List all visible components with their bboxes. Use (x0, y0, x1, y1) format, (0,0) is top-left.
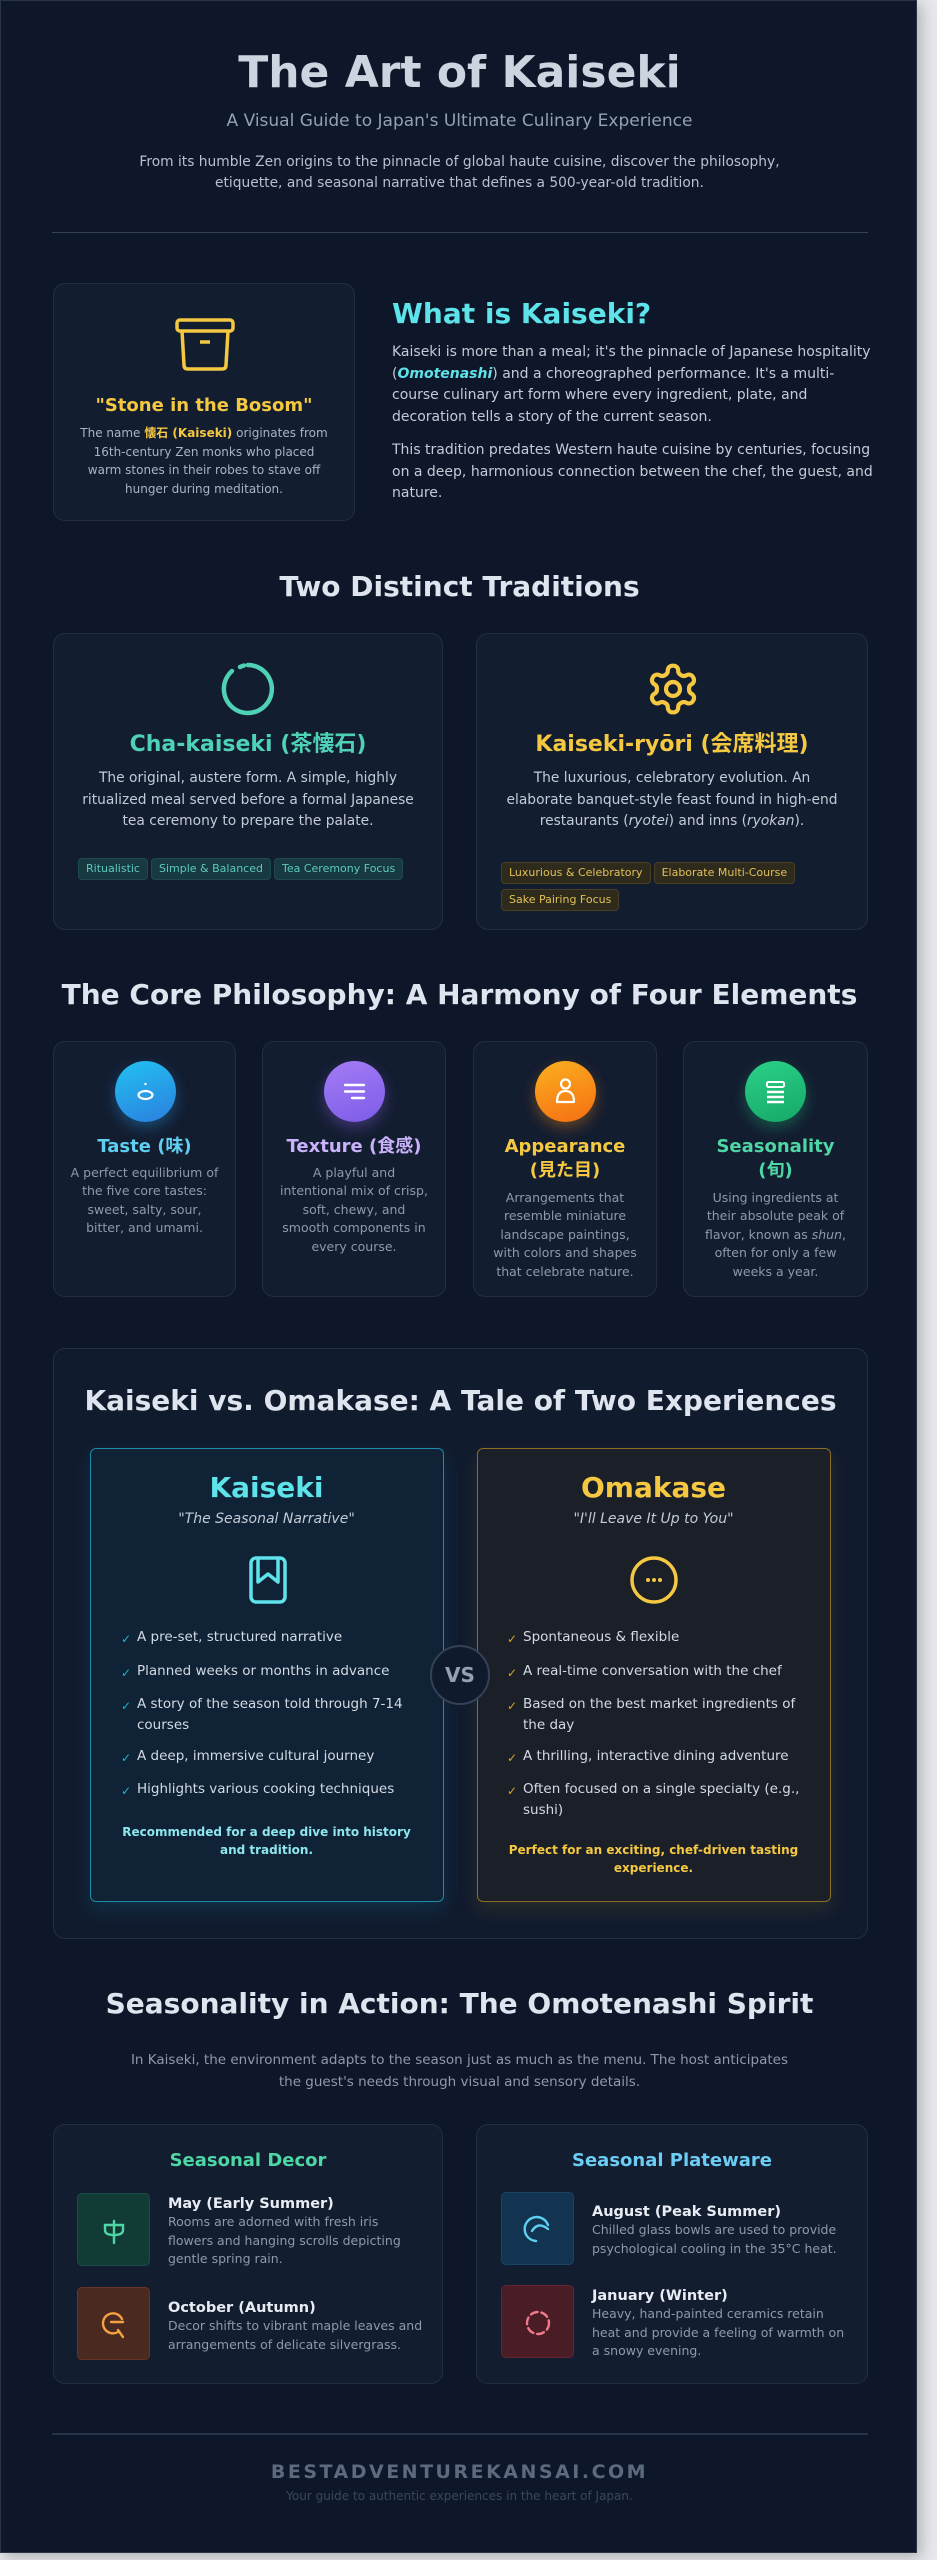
item: january: Heavy, hand-painted ceramics retain heat and provide a feeling of warmth on a snowy evening. (592, 2306, 844, 2358)
icon: gear (650, 664, 696, 714)
tags: cha-kaiseki: Ritualistic (86, 862, 140, 875)
heading: kaiseki-ryori: Kaiseki-ryōri (会席料理) (535, 732, 809, 757)
list: kaiseki: ✓ (121, 1699, 131, 1713)
footer: tagline: Your guide to authentic experiences in the heart of Japan. (286, 2489, 633, 2503)
heading: seasonality: (旬) (758, 1160, 793, 1181)
heading: seasonality in action: Seasonality in Action: The Omotenashi Spirit (106, 1987, 813, 2020)
text: what is kaiseki: Kaiseki is more than a meal; it's the pinnacle of Japanese hospitality (392, 344, 871, 360)
list: kaiseki: ✓ (121, 1666, 131, 1680)
text: cha-kaiseki: The original, austere form. A simple, highly ritualized meal served before a formal Japanese tea ceremony to prepare the palate. (82, 770, 414, 829)
icon: stone box (175, 318, 235, 371)
icon: iris (77, 2193, 150, 2266)
heading: seasonal decor: Seasonal Decor (170, 2150, 326, 2171)
list: omakase: Often focused on a single specialty (e.g., sushi) (523, 1781, 799, 1818)
icon: taste (115, 1061, 176, 1122)
item: january: January (Winter) (592, 2288, 728, 2304)
panel: kaiseki vs omakase (53, 1348, 868, 1939)
panel: seasonal plateware (476, 2124, 868, 2384)
list: kaiseki: ✓ (121, 1632, 131, 1646)
item: january (501, 2285, 844, 2358)
item: october: Decor shifts to vibrant maple leaves and arrangements of delicate silvergrass. (168, 2318, 422, 2352)
icon: vs badge (430, 1645, 490, 1705)
list: omakase: ✓ (507, 1699, 517, 1713)
item: october: October (Autumn) (168, 2300, 316, 2316)
list: omakase (507, 1629, 799, 1818)
icon: seasonality (745, 1061, 806, 1122)
list: kaiseki: ✓ (121, 1751, 131, 1765)
list: omakase: ✓ (507, 1666, 517, 1680)
list: omakase: Spontaneous & flexible (523, 1629, 679, 1645)
heading: appearance: (見た目) (530, 1160, 600, 1181)
text: what is kaiseki (392, 344, 873, 501)
item: may (77, 2193, 401, 2266)
heading: seasonality: Seasonality (716, 1136, 835, 1157)
list: omakase: Based on the best market ingredients of the day (523, 1696, 795, 1733)
list: kaiseki: A story of the season told through 7-14 courses (137, 1696, 403, 1733)
icon: glass (501, 2192, 574, 2265)
heading: seasonal plateware: Seasonal Plateware (572, 2150, 772, 2171)
list: omakase: ✓ (507, 1784, 517, 1798)
heading: texture: Texture (食感) (287, 1136, 421, 1157)
callout: omakase: Perfect for an exciting, chef-driven tasting experience. (509, 1843, 798, 1875)
heading: stone in the bosom: "Stone in the Bosom" (95, 395, 313, 416)
list: kaiseki: A pre-set, structured narrative (137, 1629, 342, 1645)
list: kaiseki (121, 1629, 403, 1798)
item: august: August (Peak Summer) (592, 2204, 781, 2220)
tags: kaiseki-ryori: Sake Pairing Focus (509, 893, 611, 906)
heading: two traditions: Two Distinct Traditions (279, 570, 640, 603)
list: kaiseki: Planned weeks or months in advance (137, 1663, 389, 1679)
list: omakase: ✓ (507, 1751, 517, 1765)
icon: vs badge: VS (445, 1663, 475, 1687)
heading: what is kaiseki: What is Kaiseki? (392, 297, 651, 330)
item: august: Chilled glass bowls are used to provide psychological cooling in the 35°C heat. (592, 2222, 837, 2256)
quote: omakase: "I'll Leave It Up to You" (573, 1511, 734, 1527)
text: taste: A perfect equilibrium of the five core tastes: sweet, salty, sour, bitter, and umami. (71, 1165, 218, 1235)
tags: cha-kaiseki (78, 858, 403, 880)
heading: core philosophy: The Core Philosophy: A Harmony of Four Elements (62, 978, 857, 1011)
heading: vs: Kaiseki vs. Omakase: A Tale of Two Experiences (84, 1384, 837, 1417)
tags: kaiseki-ryori: Elaborate Multi-Course (662, 866, 787, 879)
card: kaiseki (90, 1448, 444, 1902)
text: what is kaiseki: decoration tells a story of the current season. (392, 408, 712, 424)
list: kaiseki: A deep, immersive cultural journey (137, 1748, 374, 1764)
text: what is kaiseki: nature. (392, 485, 442, 501)
text: what is kaiseki: (Omotenashi) and a choreographed performance. It's a multi- (392, 366, 834, 382)
item: may: Rooms are adorned with fresh iris flowers and hanging scrolls depicting gentle spring rain. (168, 2214, 401, 2266)
icon: circle (222, 662, 274, 716)
panel: kaiseki-ryori (476, 633, 868, 930)
intro text: From its humble Zen origins to the pinnacle of global haute cuisine, discover the philosophy, etiquette, and seasonal narrative that defines a 500-year-old tradition. (139, 154, 780, 191)
item: august (501, 2192, 837, 2265)
title: The Art of Kaiseki (238, 47, 681, 98)
text: texture: A playful and intentional mix of crisp, soft, chewy, and smooth components in every course. (280, 1165, 428, 1254)
panel: taste (53, 1041, 236, 1297)
heading: appearance: Appearance (505, 1136, 625, 1157)
icon: chat (630, 1556, 678, 1604)
text: what is kaiseki: course culinary art form where every ingredient, plate, and (392, 387, 807, 403)
heading: kaiseki: Kaiseki (209, 1471, 324, 1504)
subtitle: A Visual Guide to Japan's Ultimate Culinary Experience (227, 111, 692, 131)
panel: seasonal decor (53, 2124, 443, 2384)
text: kaiseki-ryori: The luxurious, celebratory evolution. An elaborate banquet-style feast found in high-end restaurants (ryotei) and inns (ryokan). (507, 770, 837, 829)
heading: cha-kaiseki: Cha-kaiseki (茶懐石) (130, 732, 366, 757)
tags: kaiseki-ryori: Luxurious & Celebratory (509, 866, 643, 879)
text: what is kaiseki: This tradition predates Western haute cuisine by centuries, focusing (392, 442, 870, 458)
tags: cha-kaiseki: Simple & Balanced (159, 862, 263, 875)
tags: kaiseki-ryori (501, 862, 795, 911)
panel: stone in the bosom (53, 283, 355, 521)
panel: appearance (473, 1041, 657, 1297)
callout: kaiseki: Recommended for a deep dive into history and tradition. (122, 1825, 411, 1857)
panel: seasonality (683, 1041, 868, 1297)
icon: book (249, 1556, 287, 1604)
list: omakase: A real-time conversation with the chef (523, 1663, 782, 1679)
item: october (77, 2287, 422, 2360)
heading: taste: Taste (味) (97, 1136, 192, 1157)
list: kaiseki: Highlights various cooking techniques (137, 1781, 394, 1797)
quote: kaiseki: "The Seasonal Narrative" (178, 1511, 355, 1527)
panel: cha-kaiseki (53, 633, 443, 930)
icon: appearance (535, 1061, 596, 1122)
text: seasonality: Using ingredients at their absolute peak of flavor, known as shun, often for only a few weeks a year. (705, 1190, 846, 1279)
text: what is kaiseki: on a deep, harmonious connection between the chef, the guest, and (392, 464, 873, 480)
card: omakase (477, 1448, 831, 1902)
icon: ceramic (501, 2285, 574, 2358)
tags: cha-kaiseki: Tea Ceremony Focus (282, 862, 395, 875)
heading: seasonality (716, 1136, 835, 1181)
list: omakase: ✓ (507, 1632, 517, 1646)
panel: texture (262, 1041, 446, 1297)
heading: omakase: Omakase (581, 1471, 726, 1504)
text: stone description: The name 懐石 (Kaiseki) originates from 16th-century Zen monks who placed warm stones in their robes to stave off hunger during meditation. (80, 426, 328, 496)
text: seasonality intro: In Kaiseki, the environment adapts to the season just as much as the menu. The host anticipates the guest's needs through visual and sensory details. (131, 2052, 788, 2090)
icon: texture (324, 1061, 385, 1122)
list: kaiseki: ✓ (121, 1784, 131, 1798)
icon: maple (77, 2287, 150, 2360)
footer: brand: BESTADVENTUREKANSAI.COM (271, 2461, 648, 2483)
heading: appearance (504, 1136, 625, 1181)
item: may: May (Early Summer) (168, 2196, 334, 2212)
list: omakase: A thrilling, interactive dining adventure (523, 1748, 789, 1764)
text: appearance: Arrangements that resemble miniature landscape paintings, with colors and shapes that celebrate nature. (493, 1190, 637, 1279)
